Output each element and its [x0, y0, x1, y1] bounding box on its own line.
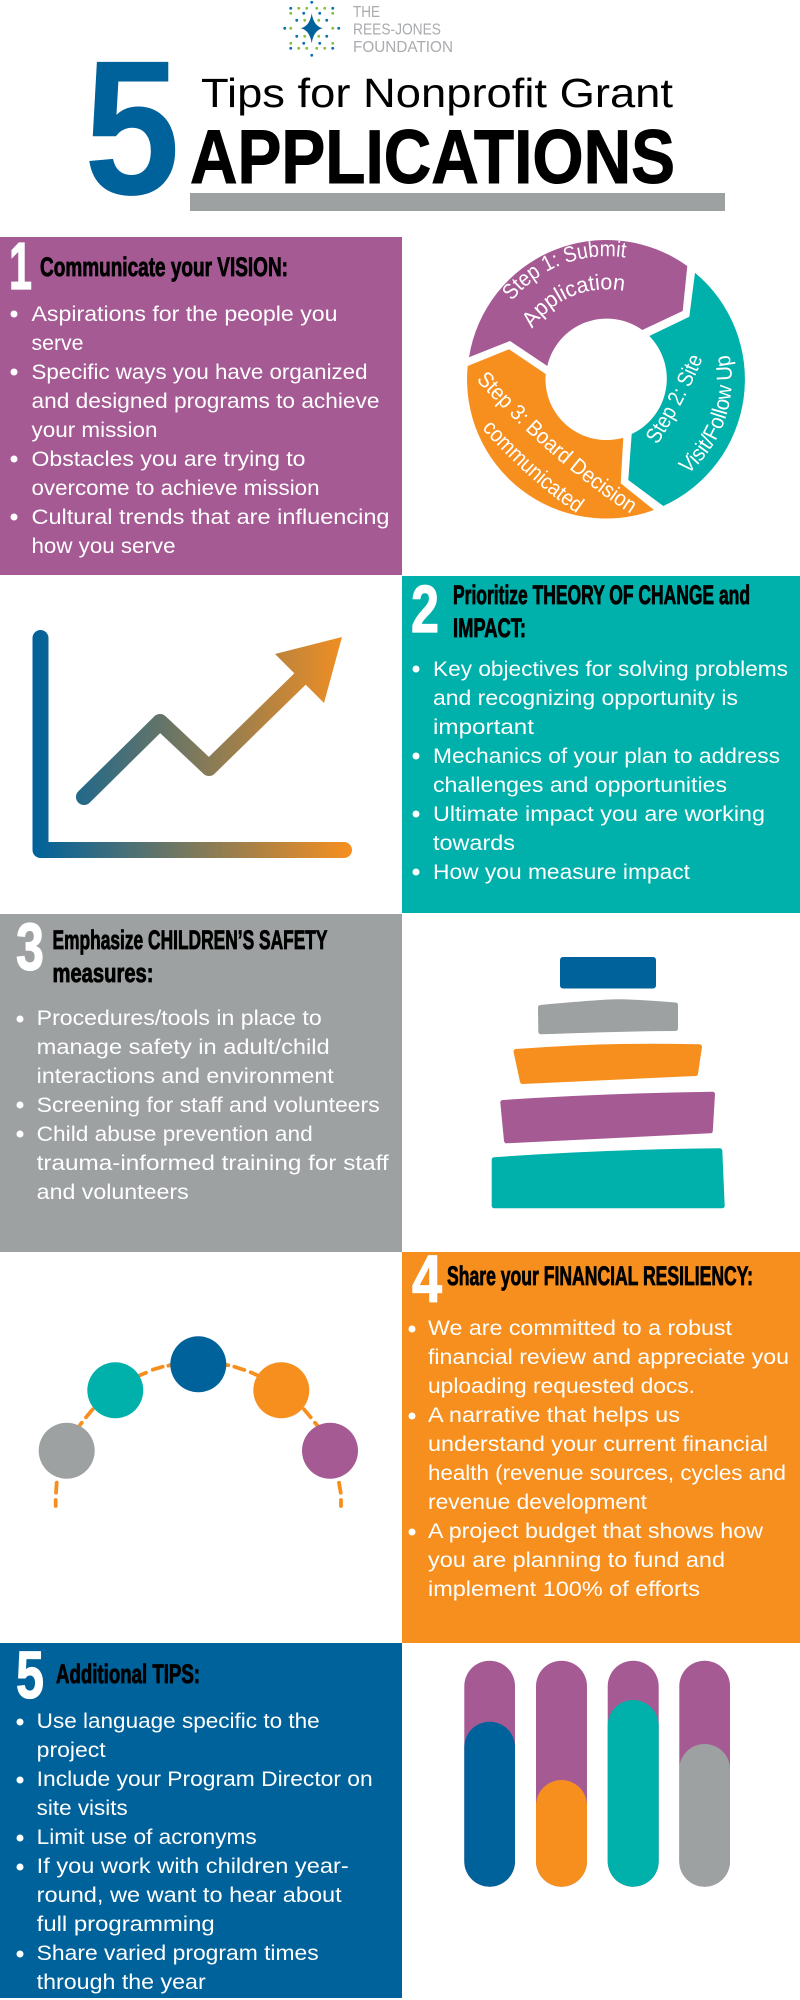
bullet list 3: Screening for staff and volunteers	[37, 1093, 380, 1117]
dot: purple	[302, 1423, 358, 1479]
heading 3: measures:	[52, 958, 154, 988]
bullet list 2: Ultimate impact you are working	[433, 802, 765, 826]
heading 2: IMPACT:	[453, 613, 526, 643]
bullet list 5: Limit use of acronyms	[37, 1825, 257, 1849]
logo: The Rees-Jones Foundation	[285, 2, 453, 56]
logo wordmark: REES-JONES	[353, 22, 441, 38]
bullet list 1: serve	[32, 331, 84, 355]
heading 2	[453, 580, 750, 643]
heading 3: Emphasize CHILDREN’S SAFETY	[52, 925, 328, 955]
bullet list 5: Use language specific to the	[37, 1709, 320, 1733]
bullet list 3: trauma-informed training for staff	[37, 1151, 389, 1175]
bullet list 5: round, we want to hear about	[37, 1883, 342, 1907]
title line 1: Tips for Nonprofit Grant	[201, 70, 674, 116]
bullet list 3	[16, 1006, 389, 1204]
pyramid level: purple	[503, 1094, 712, 1141]
bullet list 4: A project budget that shows how	[428, 1519, 764, 1543]
bullet list 2: towards	[433, 831, 515, 855]
icon: rising line chart with arrow	[40, 637, 344, 850]
heading 5: Additional TIPS:	[56, 1659, 200, 1689]
logo wordmark: THE	[353, 4, 380, 21]
bullet list 3: and volunteers	[37, 1180, 189, 1204]
panel 1: communicate your vision	[0, 229, 402, 575]
bullet list 1: overcome to achieve mission	[32, 476, 320, 500]
logo wordmark: FOUNDATION	[353, 39, 453, 56]
dot: teal	[87, 1362, 143, 1418]
chart: four rounded progress bars	[464, 1661, 730, 1887]
segment: step 1	[469, 240, 687, 366]
bullet list 4: health (revenue sources, cycles and	[428, 1461, 786, 1485]
bar 4	[679, 1661, 730, 1887]
title underline bar	[190, 193, 725, 211]
bullet list 4: A narrative that helps us	[428, 1403, 680, 1427]
number 2: 2	[411, 572, 439, 647]
bar 3	[608, 1661, 659, 1887]
title	[84, 20, 725, 235]
bullet list 1: Cultural trends that are influencing	[32, 505, 390, 529]
bullet list 5: site visits	[37, 1796, 128, 1820]
bullet list 2: challenges and opportunities	[433, 773, 727, 797]
bullet list 2: and recognizing opportunity is	[433, 686, 738, 710]
step labels: communicated	[484, 422, 585, 513]
bullet list 5	[16, 1709, 373, 1994]
bullet list 4: We are committed to a robust	[428, 1316, 732, 1340]
pyramid level: teal	[494, 1151, 722, 1206]
bullet list 2: important	[433, 715, 534, 739]
bullet list 5: project	[37, 1738, 106, 1762]
chart axes	[40, 638, 344, 850]
pyramid level: blue	[560, 957, 656, 988]
bullet list 3: manage safety in adult/child	[37, 1035, 330, 1059]
bullet list 4: implement 100% of efforts	[428, 1577, 700, 1601]
bullet list 3: Procedures/tools in place to	[37, 1006, 322, 1030]
trend line	[84, 679, 300, 797]
icon: logo star burst	[285, 2, 339, 55]
dot: blue	[170, 1336, 226, 1392]
pyramid level: gray	[540, 1002, 676, 1032]
bullet list 5: Share varied program times	[37, 1941, 319, 1965]
panel 2: theory of change and impact	[402, 572, 800, 913]
heading 3	[52, 925, 328, 988]
icon: arc of five connected dots	[39, 1336, 358, 1506]
bar 2	[536, 1661, 587, 1887]
bullet list 4: financial review and appreciate you	[428, 1345, 789, 1369]
bullet list 5: Include your Program Director on	[37, 1767, 373, 1791]
bullet list 1	[10, 302, 390, 558]
bullet list 4: you are planning to fund and	[428, 1548, 725, 1572]
step labels: Application	[524, 274, 624, 329]
bullet list 1: Obstacles you are trying to	[32, 447, 306, 471]
heading 1: Communicate your VISION:	[40, 252, 288, 282]
number 5: 5	[16, 1638, 44, 1713]
segment: step 2	[628, 273, 745, 506]
bullet list 1: how you serve	[32, 534, 176, 558]
bullet list 3: interactions and environment	[37, 1064, 334, 1088]
segment: step 3	[467, 349, 654, 519]
bullet list 2: Mechanics of your plan to address	[433, 744, 780, 768]
dot: gray	[39, 1423, 95, 1479]
bullet list 2	[412, 657, 788, 884]
bar 1	[464, 1661, 515, 1887]
bullet list 4: understand your current financial	[428, 1432, 768, 1456]
bullet list 1: and designed programs to achieve	[32, 389, 380, 413]
step labels: Visit/Follow Up	[678, 356, 736, 471]
number 4: 4	[412, 1242, 442, 1317]
bullet list 1: Aspirations for the people you	[32, 302, 338, 326]
bullet list 5: If you work with children year-	[37, 1854, 349, 1878]
bullet list 1: Specific ways you have organized	[32, 360, 368, 384]
bullet list 1: your mission	[32, 418, 158, 442]
panel 5: additional tips	[0, 1638, 402, 1998]
step labels	[478, 240, 736, 514]
dot: orange	[253, 1362, 309, 1418]
bullet list 2: Key objectives for solving problems	[433, 657, 788, 681]
bullet list 3: Child abuse prevention and	[37, 1122, 313, 1146]
bullet list 5: through the year	[37, 1970, 206, 1994]
bullet list 2: How you measure impact	[433, 860, 690, 884]
bullet list 4: revenue development	[428, 1490, 647, 1514]
arrow head	[275, 637, 342, 703]
step labels: Step 3: Board Decision	[478, 372, 635, 514]
panel 4: financial resiliency	[402, 1242, 800, 1643]
step labels: Step 2: Site	[646, 356, 702, 443]
panel 3: children's safety measures	[0, 910, 402, 1252]
bullet list 5: full programming	[37, 1912, 215, 1936]
number 1: 1	[9, 229, 32, 304]
bullet list 4	[408, 1316, 789, 1601]
number 3: 3	[16, 910, 44, 985]
chart: three-step cycle donut	[467, 240, 745, 518]
title numeral 5: 5	[84, 20, 180, 235]
dashed connector	[56, 1365, 341, 1506]
step labels: Step 1: Submit	[503, 240, 626, 299]
title line 2: APPLICATIONS	[190, 115, 675, 200]
bullet list 4: uploading requested docs.	[428, 1374, 695, 1398]
pyramid level: orange	[516, 1046, 700, 1082]
icon: stacked pyramid of bars	[494, 957, 722, 1206]
logo wordmark	[353, 4, 453, 56]
